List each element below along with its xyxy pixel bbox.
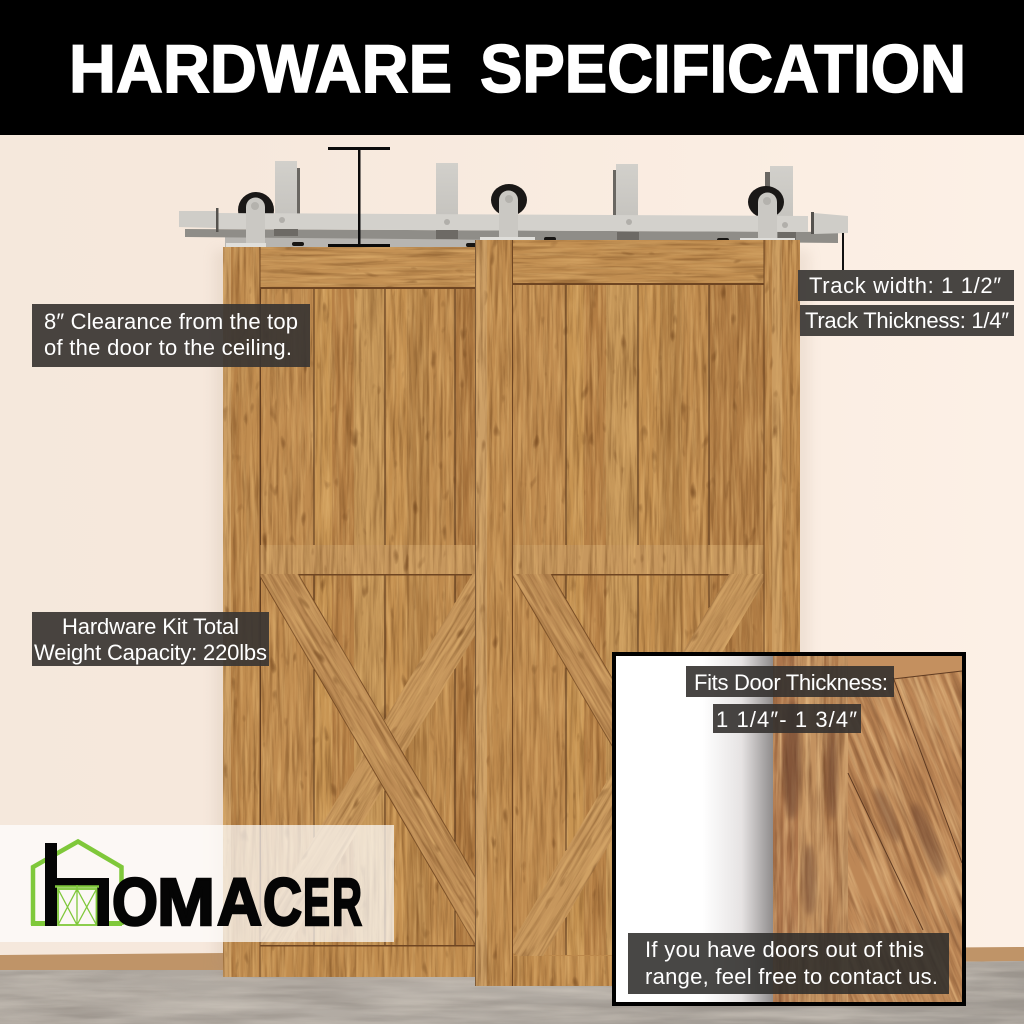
logo wordmark: A	[217, 865, 262, 940]
label: thickness range: 1 1/4″- 1 3/4″	[716, 707, 857, 732]
door top rail	[260, 247, 475, 289]
label: fits door thickness: Fits Door Thickness:	[694, 670, 888, 695]
wheels	[238, 184, 784, 228]
logo band	[0, 825, 394, 942]
door X brace	[513, 574, 764, 956]
label: track thickness: Track Thickness: 1/4″	[805, 308, 1009, 333]
label: weight capacity	[32, 612, 269, 666]
door stile	[223, 247, 260, 977]
track bolts	[279, 217, 788, 228]
hanger straps	[246, 190, 777, 245]
logo wordmark: R	[332, 865, 362, 940]
lower track	[185, 229, 838, 243]
label: clearance: of the door to the ceiling.	[44, 335, 292, 360]
barn door track hardware	[179, 161, 848, 247]
door bottom rail	[513, 956, 764, 986]
title	[69, 31, 966, 107]
right barn door	[475, 240, 800, 986]
logo wordmark: O	[112, 865, 158, 940]
label: contact note: range, feel free to contact us.	[645, 964, 938, 989]
main track bar	[218, 213, 808, 232]
logo wordmark: M	[157, 865, 215, 940]
title: HARDWARE	[69, 31, 452, 107]
label: weight capacity: Weight Capacity: 220lbs	[34, 640, 267, 665]
clearance dimension marker	[328, 147, 390, 247]
door top rail	[513, 240, 764, 285]
label: track width: Track width: 1 1/2″	[809, 273, 1001, 298]
door planks	[260, 289, 475, 946]
logo wordmark: E	[303, 865, 330, 940]
logo wordmark: C	[263, 865, 302, 940]
logo wordmark	[112, 865, 362, 940]
label: clearance: 8″ Clearance from the top	[44, 309, 298, 334]
door middle rail	[513, 545, 764, 576]
track callout leader line	[842, 233, 844, 270]
icon: green barn doors	[55, 885, 99, 925]
left barn door	[223, 247, 475, 977]
title: SPECIFICATION	[480, 31, 966, 107]
icon: black H	[45, 843, 109, 926]
logo: Homacer	[31, 842, 362, 940]
door X brace	[260, 574, 475, 945]
label: contact note	[628, 933, 949, 994]
inset: door thickness close-up	[612, 652, 966, 1006]
door planks	[513, 285, 764, 955]
label: clearance	[32, 304, 310, 367]
door shadow on wall	[214, 250, 810, 975]
mounting brackets	[275, 161, 793, 218]
label: contact note: If you have doors out of this	[645, 937, 924, 962]
door middle rail	[260, 545, 475, 576]
door stiles	[475, 240, 800, 986]
icon: green house outline	[33, 842, 122, 925]
label: weight capacity: Hardware Kit Total	[62, 614, 239, 639]
header band	[0, 0, 1024, 135]
baseboard	[0, 947, 1024, 971]
door bottom rail	[260, 945, 475, 977]
inset wood close-up	[773, 656, 962, 1002]
floor	[0, 960, 1024, 1024]
